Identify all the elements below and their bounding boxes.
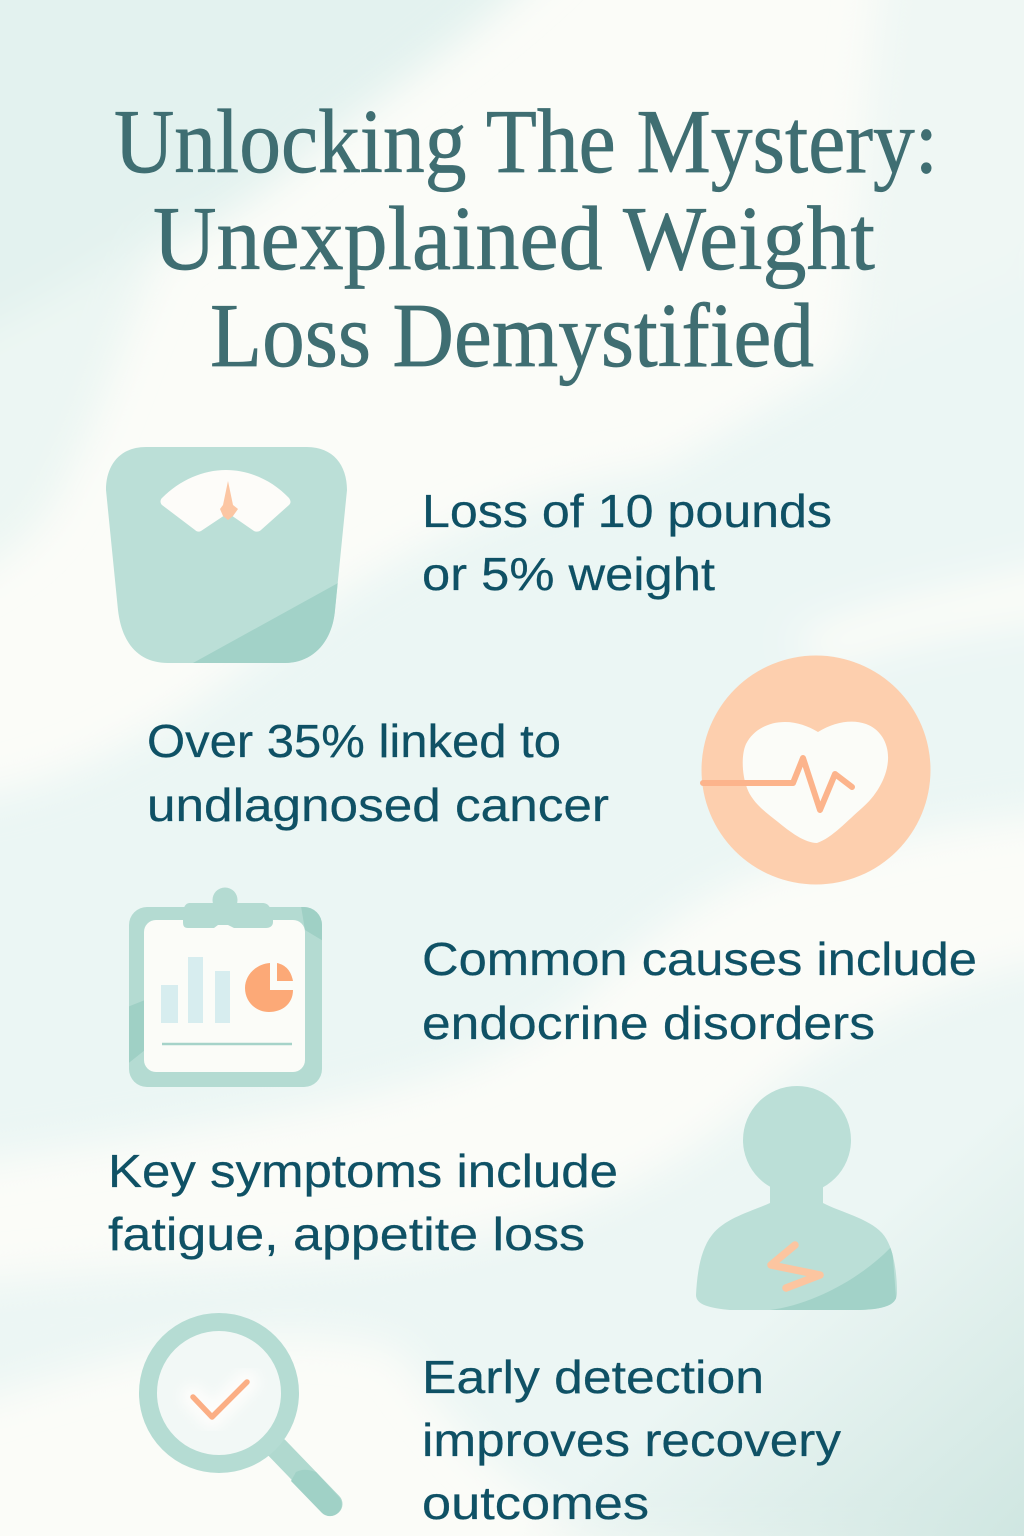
icon: magnifying glass with check bbox=[148, 1322, 342, 1516]
text: key symptoms bbox=[108, 1145, 618, 1260]
text: key symptoms: Key symptoms include bbox=[108, 1145, 618, 1197]
title: Loss Demystified bbox=[210, 285, 814, 386]
text: loss of 10 pounds: or 5% weight bbox=[422, 548, 715, 600]
text: early detection: Early detection bbox=[422, 1351, 764, 1403]
text: early detection: outcomes bbox=[422, 1477, 649, 1529]
text: loss of 10 pounds bbox=[422, 485, 832, 600]
text: over 35% linked bbox=[147, 715, 609, 831]
title bbox=[114, 91, 938, 386]
icon: heart with pulse bbox=[702, 656, 930, 884]
icon: person with abdominal pain bbox=[696, 1086, 897, 1310]
text: over 35% linked: Over 35% linked to bbox=[147, 715, 561, 767]
text: common causes: endocrine disorders bbox=[422, 997, 875, 1049]
text: loss of 10 pounds: Loss of 10 pounds bbox=[422, 485, 832, 537]
text: common causes bbox=[422, 933, 977, 1049]
title: Unlocking The Mystery: bbox=[114, 91, 938, 192]
icon: bathroom scale bbox=[106, 447, 347, 663]
icon: clipboard with charts bbox=[120, 888, 330, 1087]
title: Unexplained Weight bbox=[153, 188, 875, 289]
text: early detection: improves recovery bbox=[422, 1414, 841, 1466]
text: key symptoms: fatigue, appetite loss bbox=[108, 1208, 585, 1260]
text: common causes: Common causes include bbox=[422, 933, 977, 985]
text: over 35% linked: undlagnosed cancer bbox=[147, 779, 609, 831]
text: early detection bbox=[422, 1351, 841, 1529]
